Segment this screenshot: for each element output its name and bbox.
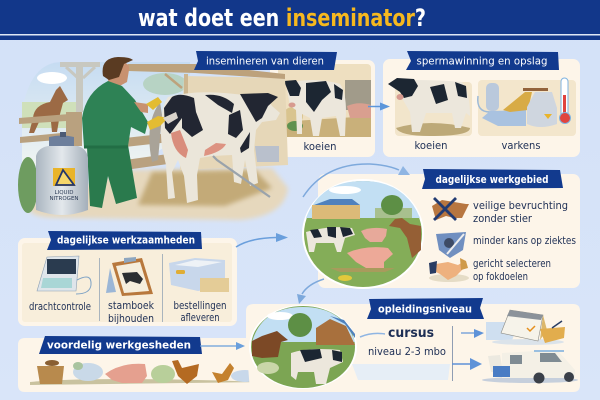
title banner bbox=[0, 0, 600, 40]
cow bbox=[149, 92, 280, 203]
sky arch bbox=[22, 62, 190, 170]
banner: insemineren van dieren: insemineren van dieren bbox=[206, 54, 324, 68]
image: cow bbox=[388, 78, 472, 136]
icon: calendar bbox=[486, 310, 565, 345]
icon: warning sign bbox=[53, 168, 75, 186]
bush bbox=[18, 157, 38, 213]
curved arrow to werkgebied bbox=[303, 164, 410, 197]
title: wat doet een inseminator? bbox=[138, 4, 426, 32]
image: storage equipment bbox=[478, 80, 576, 136]
arrow: to sperm panel bbox=[368, 102, 390, 110]
text: zonder stier bbox=[473, 212, 532, 225]
banner: insemineren van dieren bbox=[194, 51, 337, 70]
banner: voordelig werkgesheden: voordelig werkgesheden bbox=[47, 338, 191, 352]
plant bbox=[151, 365, 175, 383]
arrow bbox=[452, 358, 482, 370]
label: koeien: koeien bbox=[304, 140, 337, 153]
icon: thermometer bbox=[560, 78, 570, 124]
text: cursus: cursus bbox=[388, 326, 434, 341]
label: varkens: varkens bbox=[502, 139, 541, 152]
banner: dagelijkse werkgebied bbox=[422, 169, 563, 189]
label: afleveren bbox=[180, 311, 220, 324]
arrow bbox=[461, 329, 484, 338]
curved arrow: down bbox=[297, 279, 324, 304]
basket bbox=[37, 366, 64, 384]
banner: dagelijkse werkgebied: dagelijkse werkgebied bbox=[436, 173, 548, 186]
arrow: to second circle bbox=[200, 342, 245, 350]
tank label: NITROGEN bbox=[49, 196, 79, 202]
panel: dagelijkse werkzaamheden bbox=[18, 238, 237, 326]
cow bbox=[284, 80, 346, 136]
tank label: LIQUID bbox=[55, 190, 73, 196]
banner: opleidingsniveau: opleidingsniveau bbox=[378, 302, 472, 316]
fence bbox=[19, 112, 170, 170]
label: koeien: koeien bbox=[414, 139, 448, 152]
icon: shield bbox=[436, 232, 466, 258]
label: bijhouden bbox=[108, 312, 154, 325]
hen bbox=[212, 363, 234, 383]
arrow: to farm circle bbox=[236, 233, 288, 247]
pig bbox=[105, 364, 147, 383]
post and beams bbox=[60, 62, 100, 112]
pig bbox=[347, 247, 393, 268]
banner: opleidingsniveau bbox=[367, 298, 484, 319]
panel: voordelig werkgesheden bbox=[18, 338, 264, 392]
pig bbox=[361, 228, 387, 242]
circle: farm scene bbox=[302, 179, 424, 289]
banner: dagelijkse werkzaamheden: dagelijkse werkzaamheden bbox=[57, 234, 195, 246]
icon: handshake bbox=[429, 258, 469, 282]
text: minder kans op ziektes bbox=[473, 234, 576, 247]
icon: crate bbox=[169, 258, 229, 292]
icon: ultrasound bbox=[37, 256, 91, 294]
banner: spermawinning en opslag: spermawinning en opslag bbox=[416, 54, 548, 68]
hen bbox=[172, 360, 199, 384]
icon: clipboard bbox=[106, 257, 153, 296]
farmer bbox=[82, 57, 178, 208]
ground bbox=[29, 168, 288, 220]
banner: dagelijkse werkzaamheden bbox=[47, 231, 202, 250]
banner: spermawinning en opslag bbox=[406, 51, 559, 70]
banner: voordelig werkgesheden bbox=[39, 336, 202, 354]
text: veilige bevruchting bbox=[473, 199, 568, 212]
tank: liquid nitrogen bbox=[36, 132, 88, 215]
barn wall bbox=[180, 76, 288, 170]
circle: farm with barn bbox=[249, 305, 357, 389]
label: stamboek bbox=[108, 299, 155, 312]
label: drachtcontrole bbox=[29, 300, 91, 313]
panel: spermawinning en opslag bbox=[383, 59, 580, 157]
label: bestellingen bbox=[174, 299, 227, 312]
panel: opleidingsniveau bbox=[246, 304, 580, 392]
panel: dagelijkse werkgebied bbox=[302, 174, 580, 289]
panel: koeien bbox=[270, 60, 375, 157]
cow bbox=[306, 227, 355, 252]
text: niveau: niveau 2-3 mbo bbox=[368, 345, 446, 358]
horse bbox=[29, 86, 68, 133]
horse bbox=[389, 218, 421, 258]
icon: van bbox=[482, 350, 578, 384]
main scene: insemination bbox=[18, 57, 288, 220]
icon: no bull bbox=[432, 198, 469, 220]
text: op fokdoelen bbox=[473, 270, 528, 283]
crates bbox=[255, 146, 279, 162]
text: gericht selecteren bbox=[473, 257, 551, 270]
flowers bbox=[73, 363, 103, 381]
